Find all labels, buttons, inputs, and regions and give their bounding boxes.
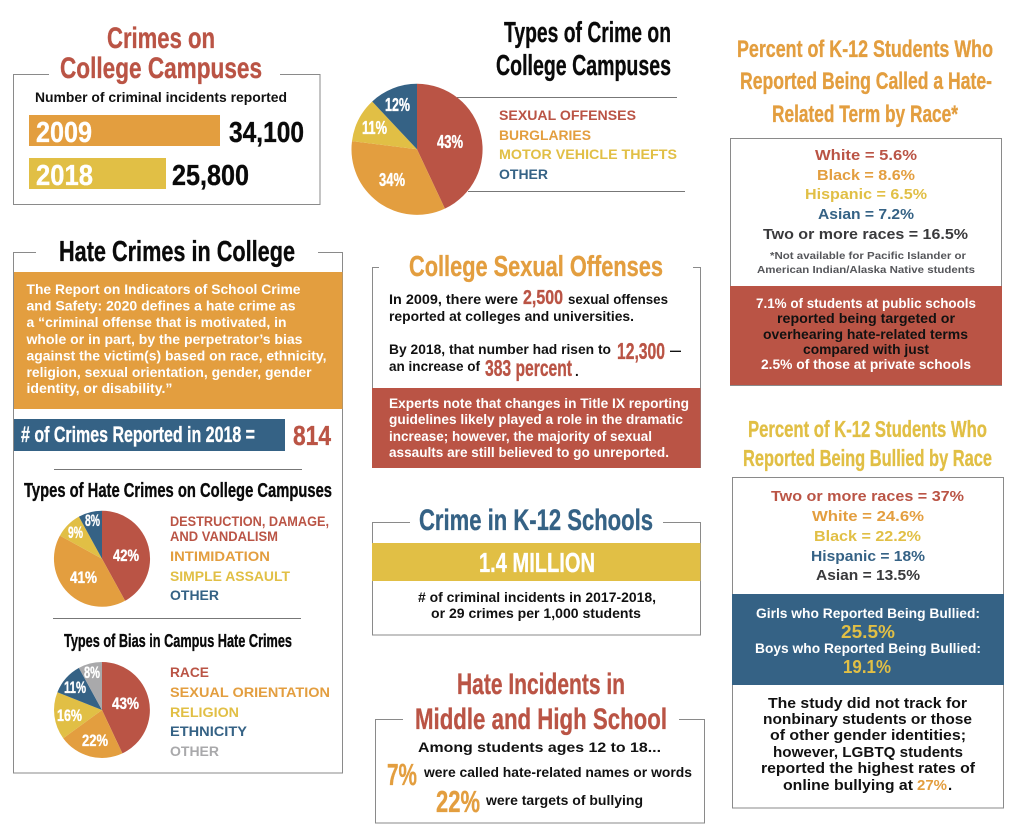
stat: 22 percent: were targets of bullying bbox=[485, 793, 643, 808]
bar: 2018 bbox=[29, 158, 249, 192]
definition block: religion, sexual orientation, gender, gender bbox=[26, 365, 312, 380]
bar: 2018: 25,800 bbox=[172, 160, 249, 192]
list: rates by race: Hispanic = 6.5% bbox=[805, 187, 927, 203]
callout: public vs private schools: compared with just bbox=[803, 342, 930, 357]
heading: hate incidents bbox=[415, 668, 667, 736]
text: 2018 offenses: 12,300 bbox=[617, 338, 665, 364]
stat band: 1.4 million: 1.4 MILLION bbox=[479, 547, 595, 578]
footnote: *Not available for Pacific Islander or bbox=[770, 250, 966, 262]
legend: types of crime: OTHER bbox=[499, 167, 548, 182]
legend: types of bias: ETHNICITY bbox=[170, 724, 247, 739]
list: bullying rates by race: Hispanic = 18% bbox=[811, 549, 925, 565]
text: lgbtq online bullying: 27% bbox=[917, 777, 947, 794]
definition block: identity, or disability.” bbox=[26, 381, 172, 396]
text: lgbtq online bullying bbox=[761, 695, 976, 794]
legend: types of hate crimes: DESTRUCTION, DAMAGE, bbox=[170, 514, 329, 529]
callout: public vs private schools: reported being targeted or bbox=[777, 311, 956, 326]
text: lgbtq online bullying: The study did not track for bbox=[768, 695, 967, 712]
list: rates by race: Black = 8.6% bbox=[817, 168, 915, 184]
panel: hate crimes in college bbox=[14, 236, 342, 773]
text: lgbtq online bullying: reported the highest rates of bbox=[761, 760, 976, 777]
pie chart: types of bias: 43% bbox=[112, 694, 139, 713]
pie chart: types of crime: 43% bbox=[437, 132, 463, 152]
list: rates by race bbox=[763, 148, 968, 243]
pie chart: types of hate crimes: 9% bbox=[68, 523, 83, 542]
callout: girls and boys bullied: 19.1% bbox=[843, 657, 891, 677]
text: lgbtq online bullying: online bullying at bbox=[783, 777, 913, 794]
list: bullying rates by race: Two or more races = 37% bbox=[771, 489, 964, 505]
stat bar: crimes reported in 2018: # of Crimes Reported in 2018 = bbox=[21, 422, 255, 447]
callout: public vs private schools: overhearing hate-related terms bbox=[763, 327, 968, 342]
text: lgbtq online bullying: . bbox=[948, 777, 952, 794]
pie chart: types of hate crimes: 42% bbox=[113, 546, 139, 565]
legend: types of hate crimes: SIMPLE ASSAULT bbox=[170, 569, 291, 584]
list: bullying rates by race: Black = 22.2% bbox=[814, 529, 921, 545]
pie chart: types of crime: 34% bbox=[379, 170, 405, 190]
text: 2009 offenses bbox=[389, 287, 668, 324]
text: criminal incidents: # of criminal incidents in 2017-2018, bbox=[418, 590, 656, 605]
callout: public vs private schools bbox=[730, 286, 1002, 385]
text: 2018 offenses: — bbox=[670, 343, 681, 358]
text: among students: Among students ages 12 to 18... bbox=[418, 739, 661, 755]
definition block: a “criminal offense that is motivated, in bbox=[26, 315, 286, 330]
callout: girls and boys bullied bbox=[732, 594, 1004, 685]
text: 2018 offenses: 383 percent bbox=[485, 355, 572, 381]
definition block: The Report on Indicators of School Crime bbox=[26, 282, 301, 297]
heading: types of crime bbox=[496, 17, 671, 82]
pie chart: types of crime: 11% bbox=[362, 118, 387, 138]
footnote: American Indian/Alaska Native students bbox=[757, 264, 975, 276]
definition block: whole or in part, by the perpetrator’s bias bbox=[25, 332, 303, 347]
panel: crimes on college campuses bbox=[14, 22, 320, 204]
pie chart: types of hate crimes: 8% bbox=[85, 511, 100, 530]
list: bullying rates by race: Asian = 13.5% bbox=[816, 568, 920, 584]
legend: types of bias: RACE bbox=[170, 665, 209, 680]
stat: 7 percent: 7% bbox=[387, 757, 417, 792]
legend: types of hate crimes: AND VANDALISM bbox=[170, 529, 278, 544]
text: lgbtq online bullying: of other gender identities; bbox=[770, 727, 966, 744]
pie chart: types of crime: 12% bbox=[385, 95, 410, 115]
legend: types of crime bbox=[499, 108, 677, 182]
stat: 22 percent: 22% bbox=[436, 784, 480, 819]
callout: girls and boys bullied: Boys who Reported Being Bullied: bbox=[755, 641, 981, 656]
legend: types of bias: SEXUAL ORIENTATION bbox=[170, 685, 330, 700]
legend: types of hate crimes: INTIMIDATION bbox=[170, 549, 270, 564]
text: criminal incidents bbox=[418, 590, 656, 621]
heading: types of bias: Types of Bias in Campus Hate Crimes bbox=[64, 631, 292, 651]
callout: public vs private schools: 2.5% of those at private schools bbox=[761, 357, 971, 372]
callout: title ix reporting: assaults are still believed to go unreported. bbox=[389, 445, 669, 460]
panel: college sexual offenses bbox=[372, 251, 700, 468]
heading: hate-related term: Related Term by Race* bbox=[772, 101, 958, 128]
heading: crime in k-12 schools: Crime in K-12 Schools bbox=[419, 504, 653, 537]
bar: 2009: 34,100 bbox=[229, 117, 304, 149]
definition block bbox=[14, 272, 342, 409]
legend: types of bias: OTHER bbox=[170, 744, 219, 759]
legend: types of crime: SEXUAL OFFENSES bbox=[499, 108, 636, 123]
legend: types of crime: MOTOR VEHICLE THEFTS bbox=[499, 147, 677, 162]
text: 2009 offenses: 2,500 bbox=[523, 287, 563, 309]
stat: 7 percent bbox=[387, 757, 692, 792]
pie chart: types of hate crimes bbox=[54, 511, 150, 607]
definition block: and Safety: 2020 defines a hate crime as bbox=[26, 298, 296, 314]
panel: hate incidents in middle and high school bbox=[376, 668, 704, 823]
list: rates by race: White = 5.6% bbox=[815, 148, 917, 164]
bar: 2018: 2018 bbox=[36, 160, 93, 192]
legend: types of bias: RELIGION bbox=[170, 705, 239, 720]
text: 2009 offenses: reported at colleges and universities. bbox=[389, 309, 634, 324]
heading: crimes on college campuses bbox=[60, 22, 262, 85]
heading: hate crimes in college: Hate Crimes in College bbox=[59, 236, 295, 268]
footnote bbox=[757, 250, 975, 276]
callout: public vs private schools: 7.1% of students at public schools bbox=[756, 296, 976, 311]
legend: types of bias bbox=[170, 665, 330, 759]
pie chart: types of bias: 16% bbox=[57, 706, 82, 725]
pie chart: types of bias: 8% bbox=[84, 663, 100, 682]
heading: hate incidents: Middle and High School bbox=[415, 703, 667, 736]
bar: 2009 bbox=[29, 115, 304, 149]
stat: 7 percent: were called hate-related names or words bbox=[423, 765, 692, 780]
heading: hate incidents: Hate Incidents in bbox=[457, 668, 625, 701]
pie chart: types of bias: 22% bbox=[82, 731, 108, 750]
stat bar: crimes reported in 2018: 814 bbox=[293, 420, 331, 451]
heading: crimes on college campuses: Crimes on bbox=[107, 22, 215, 55]
panel: bullied by race bbox=[732, 416, 1004, 808]
text: 2018 offenses: By 2018, that number had risen to bbox=[389, 342, 611, 357]
text: 2018 offenses: . bbox=[575, 364, 579, 379]
callout: girls and boys bullied: Girls who Reported Being Bullied: bbox=[756, 606, 980, 621]
callout: girls and boys bullied: 25.5% bbox=[841, 622, 895, 642]
text: lgbtq online bullying: nonbinary students or those bbox=[763, 711, 972, 728]
legend: types of hate crimes: OTHER bbox=[170, 588, 219, 603]
heading: college sexual offenses: College Sexual Offenses bbox=[409, 251, 663, 283]
pie chart: types of bias: 11% bbox=[64, 678, 86, 697]
heading: types of crime: Types of Crime on bbox=[504, 17, 671, 49]
heading: types of crime: College Campuses bbox=[496, 50, 671, 82]
heading: types of hate crimes: Types of Hate Crimes on College Campuses bbox=[24, 480, 332, 502]
text: 2018 offenses: an increase of bbox=[389, 359, 480, 374]
legend: types of hate crimes bbox=[170, 514, 329, 603]
list: bullying rates by race: White = 24.6% bbox=[812, 509, 924, 525]
panel: types of crime on college campuses bbox=[351, 17, 685, 215]
pie chart: types of hate crimes: 41% bbox=[70, 568, 97, 587]
text: criminal incidents: or 29 crimes per 1,000 students bbox=[431, 606, 641, 621]
text: 2009 offenses: sexual offenses bbox=[568, 292, 668, 307]
stat: 22 percent bbox=[436, 784, 643, 819]
definition block: against the victim(s) based on race, ethnicity, bbox=[26, 348, 326, 364]
pie chart: types of crime bbox=[351, 84, 483, 215]
callout: title ix reporting: increase; however, the majority of sexual bbox=[389, 429, 652, 444]
legend: types of crime: BURGLARIES bbox=[499, 128, 591, 143]
heading: crimes on college campuses: College Campuses bbox=[60, 52, 262, 85]
callout: title ix reporting: guidelines likely played a role in the dramatic bbox=[389, 412, 683, 427]
stat band: 1.4 million bbox=[372, 543, 700, 581]
list: rates by race: Asian = 7.2% bbox=[818, 207, 914, 223]
heading: hate-related term bbox=[737, 36, 993, 128]
panel: called a hate-related term by race bbox=[730, 36, 1002, 386]
pie chart: types of bias bbox=[54, 662, 150, 758]
panel: crime in k-12 schools bbox=[372, 504, 700, 635]
heading: bullied by race bbox=[743, 416, 992, 471]
callout: title ix reporting: Experts note that changes in Title IX reporting bbox=[389, 396, 689, 411]
bar: 2009: 2009 bbox=[36, 117, 92, 149]
text: 2009 offenses: In 2009, there were bbox=[389, 292, 519, 307]
subheading: number of incidents: Number of criminal incidents reported bbox=[35, 90, 287, 105]
callout: title ix reporting bbox=[372, 388, 700, 468]
list: rates by race: Two or more races = 16.5% bbox=[763, 227, 968, 243]
list: bullying rates by race bbox=[771, 489, 964, 584]
text: 2018 offenses bbox=[389, 338, 681, 381]
text: lgbtq online bullying: however, LGBTQ students bbox=[773, 744, 963, 761]
